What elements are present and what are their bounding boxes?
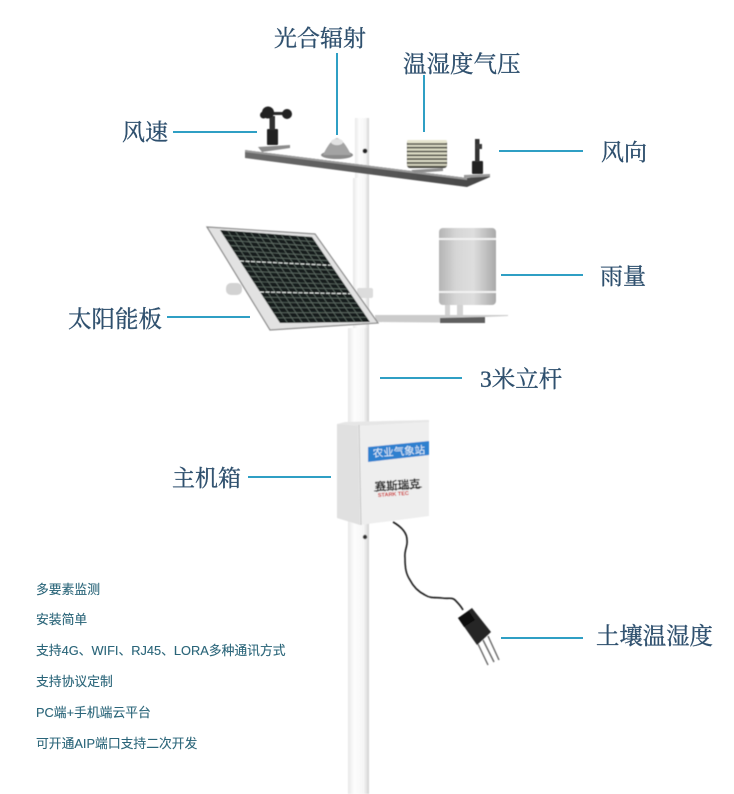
icon: anemometer [258,106,292,152]
feature list: 支持协议定制 [36,674,113,689]
pole [348,118,369,794]
label: 3米立杆: 3米立杆 [480,366,562,393]
soil probe [458,608,499,665]
label: 温湿度气压 [403,51,520,132]
label: 主机箱: 主机箱 [172,466,241,491]
label: 光合辐射: 光合辐射 [274,26,366,51]
solar panel [207,227,378,330]
cable [393,522,463,610]
logo [374,477,422,499]
icon: temperature humidity shield [407,140,447,173]
feature list: 支持4G、WIFI、RJ45、LORA多种通讯方式 [36,643,286,658]
label: 温湿度气压: 温湿度气压 [403,51,520,78]
mount bracket [375,315,508,323]
feature list: 可开通AIP端口支持二次开发 [36,736,198,751]
label: 风向: 风向 [601,140,647,165]
crossbar with sensors [245,106,490,187]
icon: radiation sensor [321,138,353,159]
feature list: 安装简单 [36,612,87,627]
control box [337,420,429,525]
label: 风速: 风速 [122,120,168,145]
logo: STARK TEC [378,491,409,499]
label: 土壤温湿度: 土壤温湿度 [596,623,713,650]
blue label: 农业气象站 [372,443,426,460]
icon: wind vane [464,139,490,178]
feature list [36,582,286,751]
label: 风速 [122,120,257,145]
logo: 赛斯瑞克 [374,477,422,494]
rain gauge [375,228,508,323]
label: 太阳能板: 太阳能板 [68,306,162,333]
label: 光合辐射 [274,26,366,135]
label: 雨量: 雨量 [600,264,646,289]
feature list: 多要素监测 [36,582,100,597]
feature list: PC端+手机端云平台 [36,705,151,720]
crossbar [245,150,490,187]
sensor cable and soil probe [393,522,499,665]
